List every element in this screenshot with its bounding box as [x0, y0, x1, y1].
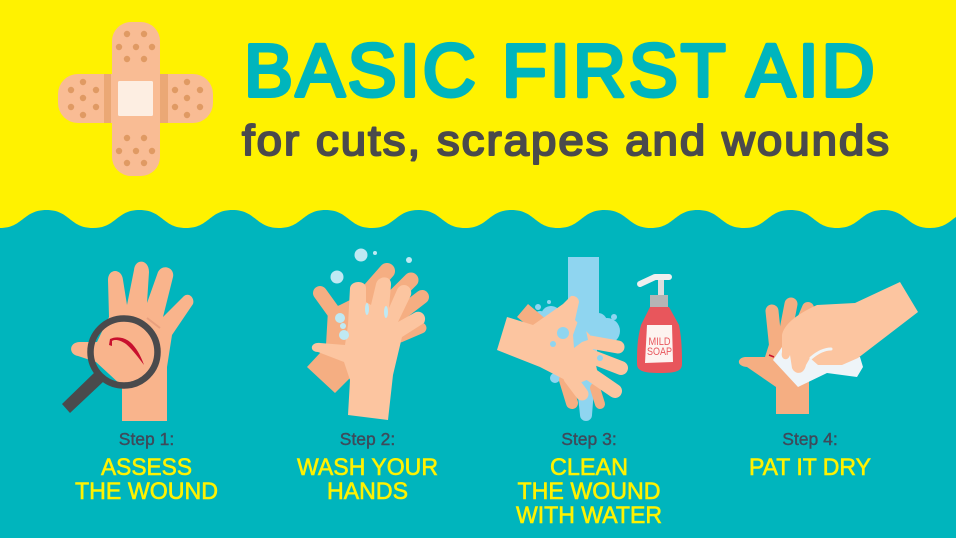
soap bottle: SOAP — [647, 346, 672, 358]
step 1 label — [75, 429, 218, 505]
soap foam and bubbles — [330, 248, 412, 340]
step 4 label: PAT IT DRY — [749, 454, 871, 481]
step 4 label — [749, 429, 871, 481]
step 2 label: HANDS — [327, 478, 408, 505]
step 3 label: THE WOUND — [518, 478, 660, 505]
icon: bandage — [58, 22, 213, 176]
soap bottle — [637, 277, 682, 373]
icon: hand with magnifying glass — [62, 262, 193, 421]
subtitle: for cuts, scrapes and wounds — [242, 117, 891, 165]
step 3 label — [516, 429, 662, 529]
step 1 label: Step 1: — [119, 429, 174, 449]
icon: patting hand dry with cloth — [739, 282, 918, 414]
step 3 label: CLEAN — [550, 454, 628, 481]
back hand — [517, 304, 547, 330]
water stream — [568, 257, 599, 421]
step 2 label: WASH YOUR — [297, 454, 438, 481]
step 2 label: Step 2: — [340, 429, 395, 449]
icon: washing hands — [307, 248, 425, 420]
step 3 label: WITH WATER — [516, 502, 662, 529]
soap bottle: MILD — [648, 336, 671, 348]
step 3 label: Step 3: — [561, 429, 617, 449]
cloth — [773, 345, 863, 387]
title: BASIC FIRST AID — [244, 29, 877, 112]
header wave band — [0, 0, 956, 228]
step 2 label — [297, 429, 438, 505]
water over hand — [573, 318, 588, 348]
wounded hand — [772, 304, 808, 350]
step 4 label: Step 4: — [782, 429, 838, 449]
front hand — [497, 296, 598, 385]
magnifying glass — [62, 318, 158, 413]
wound — [109, 337, 144, 365]
step 1 label: THE WOUND — [75, 478, 218, 505]
back hand — [320, 271, 422, 337]
foam — [533, 300, 620, 383]
step 1 label: ASSESS — [101, 454, 192, 481]
wiping hand — [782, 282, 918, 373]
front hand — [312, 277, 425, 420]
icon: rinsing hands under water — [497, 257, 682, 421]
